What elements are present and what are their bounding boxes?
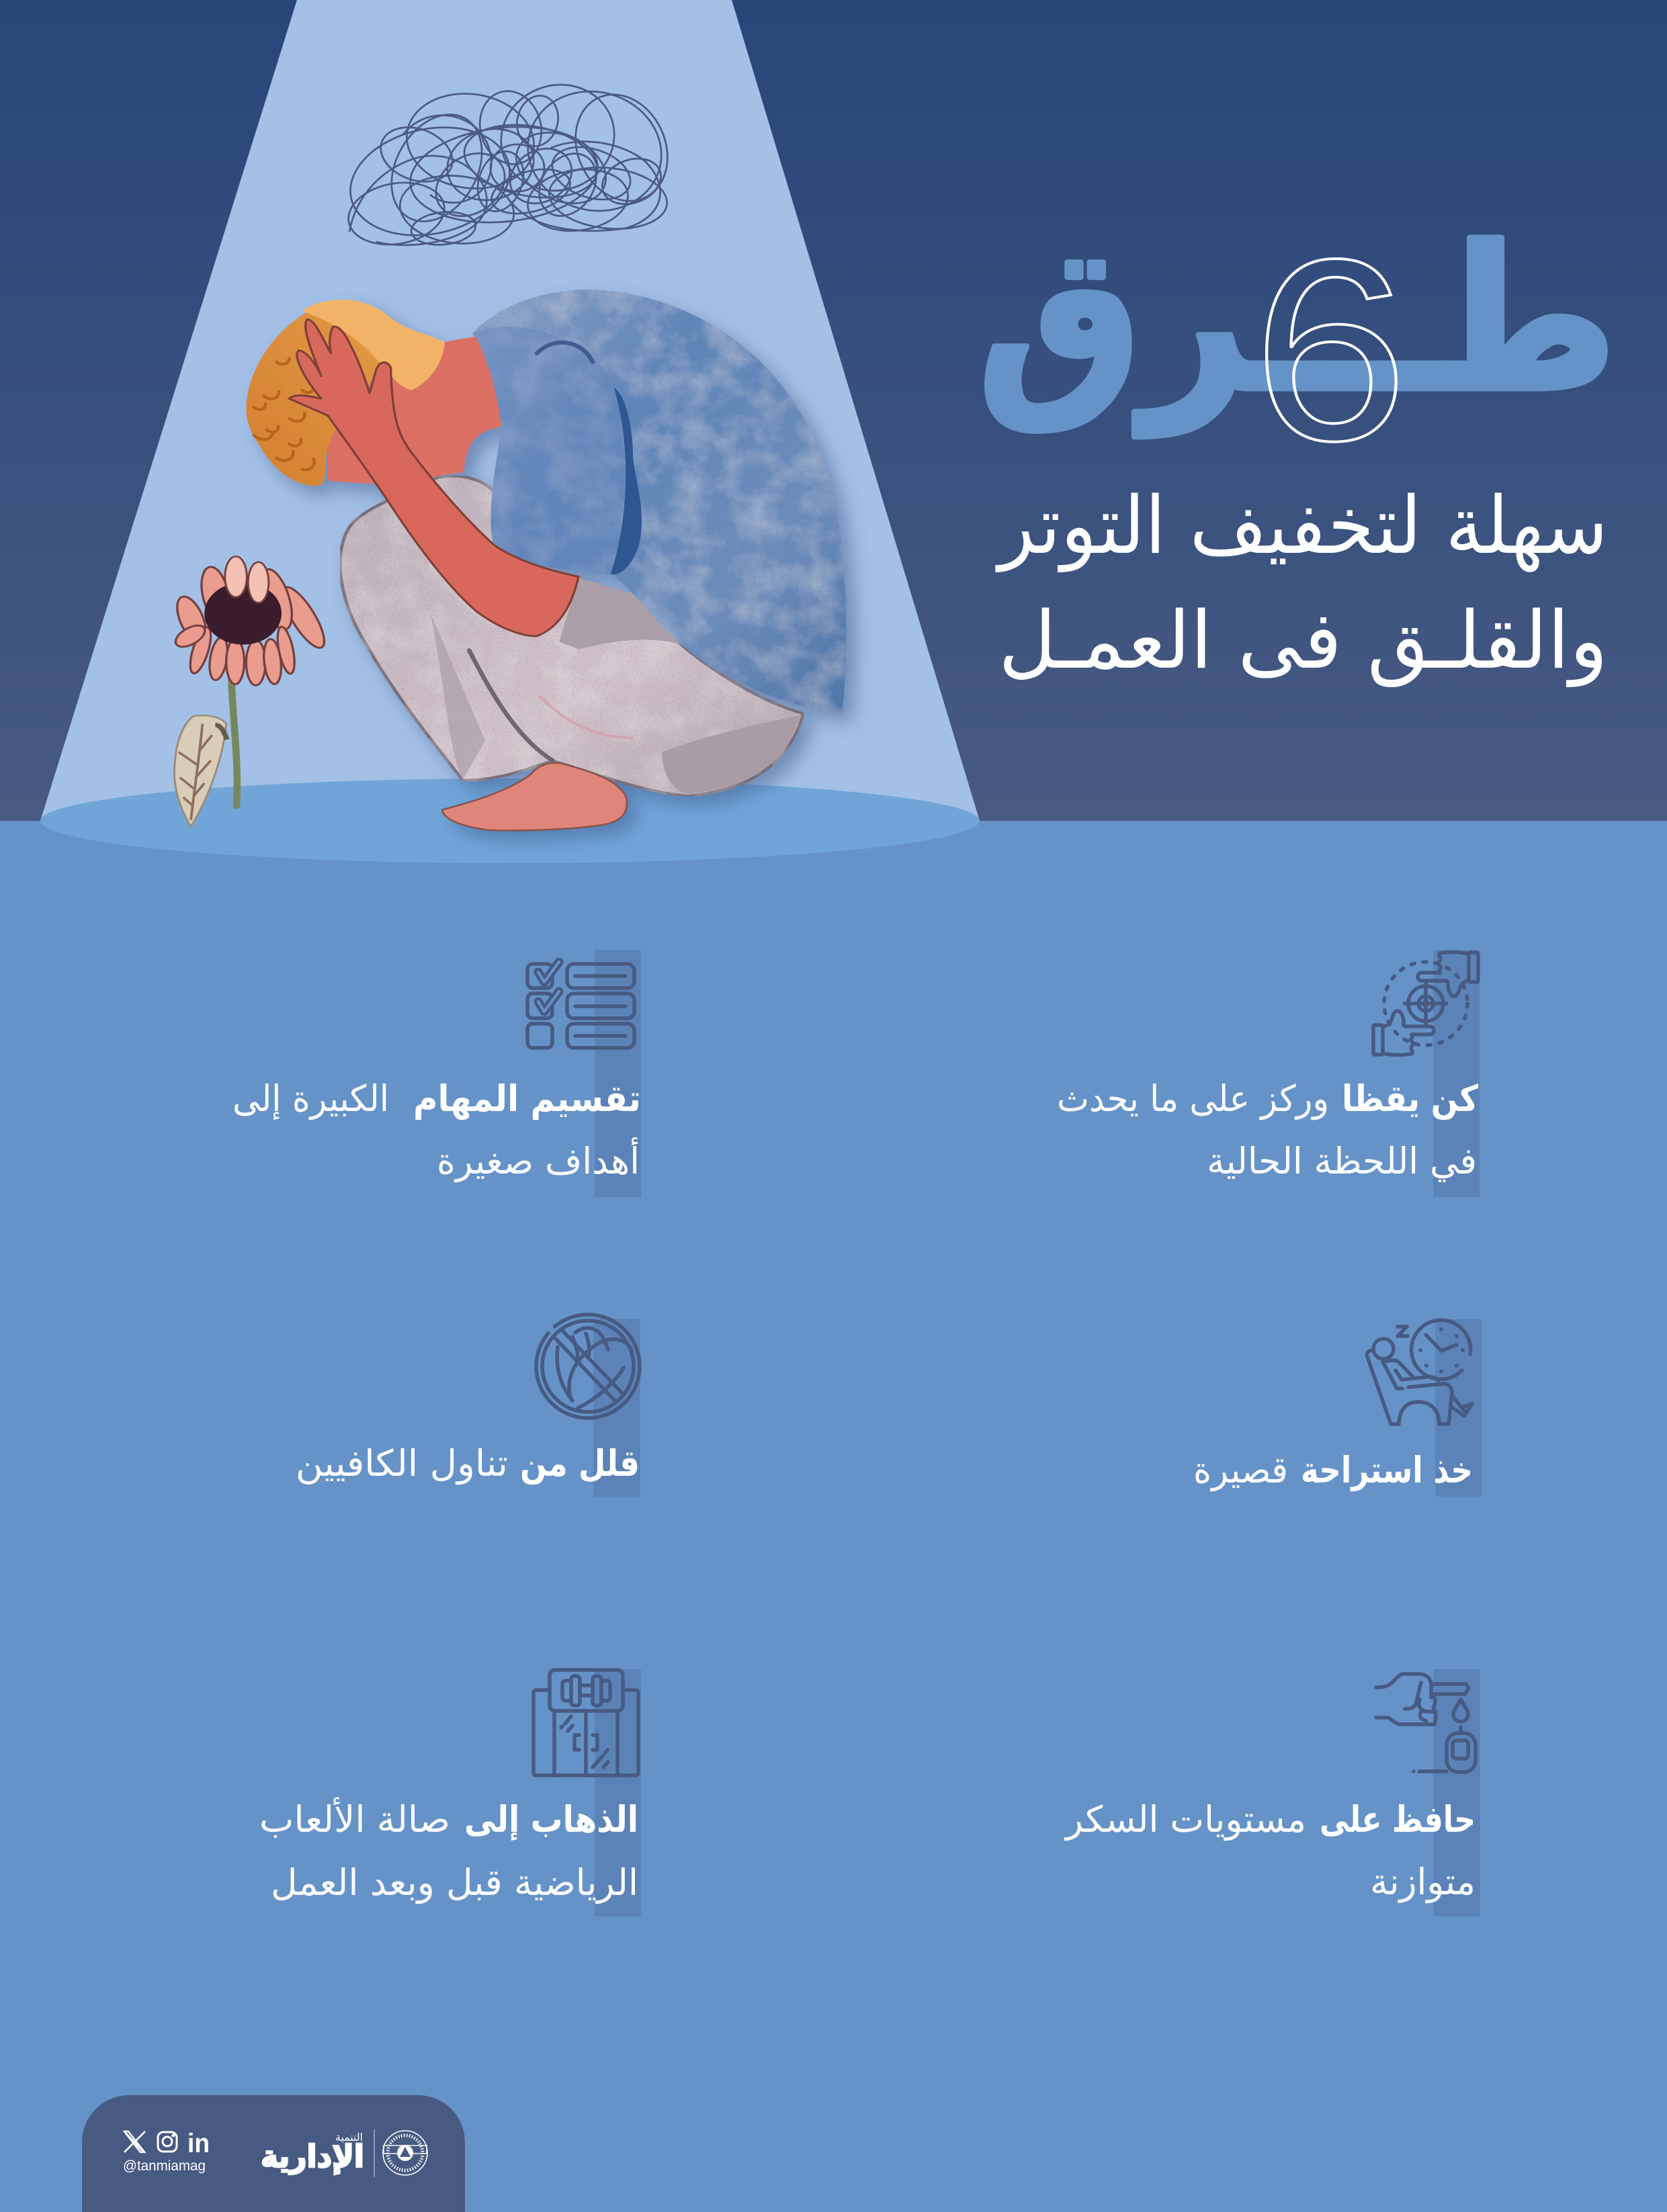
icon: crossed out coffee beans bbox=[515, 1294, 660, 1439]
tip 1: stay alert bbox=[1057, 950, 1480, 1197]
scribble of tangled thoughts bbox=[340, 69, 685, 252]
tip 5 text: حافظ على bbox=[1320, 1798, 1476, 1841]
dark header background bbox=[0, 0, 1667, 821]
tip 4 text bbox=[296, 1442, 640, 1485]
tip 1 text: وركز على ما يحدث bbox=[1057, 1077, 1329, 1120]
shirt bbox=[472, 290, 847, 713]
tip 3 text: قصيرة bbox=[1193, 1449, 1288, 1491]
subtitle line 2: والقلـق فى العمـل bbox=[998, 594, 1608, 687]
curly hair bbox=[246, 300, 445, 486]
tip 6: go to the gym bbox=[259, 1669, 641, 1916]
tip 2 text: أهداف صغيرة bbox=[437, 1137, 640, 1182]
tip 6 text bbox=[259, 1797, 638, 1904]
icon: Instagram bbox=[158, 2132, 177, 2152]
tip 3 text: خذ استراحة bbox=[1301, 1449, 1473, 1491]
illustration: wilted flower bbox=[171, 556, 332, 827]
tip 1 text: كن يقظا bbox=[1342, 1077, 1479, 1120]
tip 4: reduce caffeine bbox=[296, 1294, 660, 1497]
face and neck bbox=[328, 337, 501, 484]
tip 3 text bbox=[1193, 1449, 1473, 1491]
tip 4 text: قلل من bbox=[520, 1442, 640, 1485]
flower front petals bbox=[225, 556, 269, 603]
title numeral 6: 6 bbox=[1252, 205, 1408, 494]
icon: person resting with clock bbox=[1367, 1320, 1472, 1424]
logo seal bbox=[383, 2131, 427, 2175]
tip 1 text: في اللحظة الحالية bbox=[1207, 1140, 1477, 1182]
flower petals bbox=[171, 565, 332, 685]
tip 5 text: مستويات السكر bbox=[1064, 1798, 1306, 1841]
flower stem bbox=[231, 678, 237, 806]
icon: LinkedIn: in bbox=[187, 2129, 210, 2158]
tip 3 accent stripe bbox=[1435, 1319, 1482, 1497]
tip 5 accent stripe bbox=[1433, 1669, 1480, 1916]
tip 5 text: متوازنة bbox=[1370, 1861, 1476, 1903]
foot bbox=[442, 763, 627, 830]
flower leaf bbox=[174, 715, 227, 827]
tip 2 text: تقسيم المهام bbox=[413, 1077, 641, 1120]
flower dark centre bbox=[204, 582, 282, 645]
spotlight beam bbox=[40, 0, 980, 821]
tip 4 text: تناول الكافيين bbox=[296, 1442, 508, 1485]
tip 5: balance blood sugar bbox=[1064, 1669, 1480, 1916]
icon: hands framing a target bbox=[1373, 953, 1478, 1055]
tip 5 text bbox=[1064, 1798, 1476, 1903]
tip 6 text: الرياضية قبل وبعد العمل bbox=[271, 1861, 638, 1904]
icon: checklist bbox=[527, 962, 634, 1048]
icon: X social bbox=[124, 2131, 145, 2152]
social handle: @tanmiamag bbox=[123, 2158, 206, 2174]
raised arm and hand bbox=[289, 320, 579, 636]
logo divider bbox=[374, 2129, 375, 2177]
tip 2 text bbox=[232, 1077, 641, 1182]
logo main word: الإدارية bbox=[261, 2138, 364, 2174]
trousers bbox=[340, 476, 804, 796]
illustration: crouching stressed person bbox=[246, 290, 847, 830]
title word: ways: طـــرق bbox=[978, 204, 1617, 438]
tip 1 text bbox=[1057, 1077, 1479, 1182]
tip 1 accent stripe bbox=[1433, 950, 1480, 1197]
footer panel bbox=[82, 2095, 465, 2212]
tip 2 accent stripe bbox=[595, 950, 641, 1197]
tip 6 text: صالة الألعاب bbox=[259, 1797, 450, 1841]
subtitle line 1: سهلة لتخفيف التوتر bbox=[995, 479, 1608, 572]
lower blue background bbox=[0, 821, 1667, 2212]
tip 6 accent stripe bbox=[595, 1669, 641, 1916]
tip 3: take a short break bbox=[1193, 1319, 1482, 1497]
spotlight floor ellipse bbox=[40, 779, 980, 863]
icon: hand with glucose meter bbox=[1376, 1674, 1476, 1772]
tip 4 accent stripe bbox=[593, 1319, 640, 1497]
logo small word: التنمية bbox=[335, 2131, 363, 2143]
icon: gym building with dumbbell bbox=[533, 1670, 638, 1775]
tip 2: split big tasks bbox=[232, 950, 641, 1197]
tip 6 text: الذهاب إلى bbox=[464, 1798, 638, 1841]
tip 2 text: الكبيرة إلى bbox=[232, 1077, 389, 1120]
